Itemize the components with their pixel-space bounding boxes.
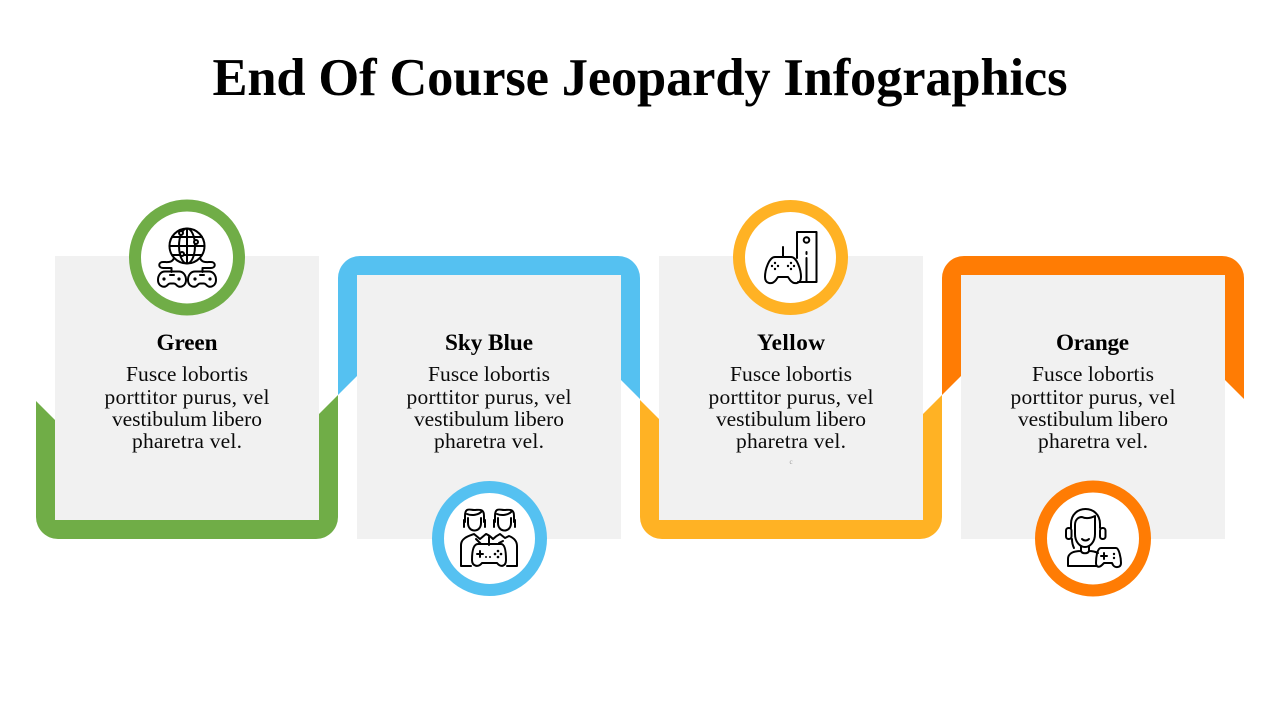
sky blue card background [357,275,621,539]
sky blue body text: pharetra vel. [434,429,544,453]
sky blue body text [406,362,572,453]
panel: yellow [640,206,942,539]
green body text [104,362,270,453]
green body text: vestibulum libero [112,407,262,431]
orange body text: Fusce lobortis [1032,362,1154,386]
icon: gamer with headset and controller [1066,509,1121,567]
icon: globe with two game controllers [158,228,216,287]
orange body text [1010,362,1176,453]
yellow body text [708,362,874,453]
panel: green [36,206,338,539]
panel: sky blue [338,256,640,590]
panel: orange [942,256,1244,590]
yellow body text: Fusce lobortis [730,362,852,386]
green body text: pharetra vel. [132,429,242,453]
yellow heading: Yellow [757,330,825,356]
yellow body text: vestibulum libero [716,407,866,431]
orange body text: vestibulum libero [1018,407,1168,431]
green bracket [36,395,338,539]
title: End Of Course Jeopardy Infographics [212,49,1068,107]
green body text: porttitor purus, vel [104,385,270,409]
sky blue bracket [338,256,640,399]
yellow icon ring [739,206,842,309]
sky blue body text: Fusce lobortis [428,362,550,386]
orange icon ring [1041,486,1145,590]
yellow body text: pharetra vel. [736,429,846,453]
tiny stray character: c [789,458,793,466]
yellow card background [659,256,923,520]
yellow bracket [640,395,942,539]
yellow body text: porttitor purus, vel [708,385,874,409]
sky blue body text: porttitor purus, vel [406,385,572,409]
green heading: Green [156,330,218,356]
orange body text: porttitor purus, vel [1010,385,1176,409]
icon: game console and controller [765,232,816,283]
orange bracket [942,256,1244,399]
green icon ring [135,206,239,310]
orange heading: Orange [1056,330,1129,356]
orange card background [961,275,1225,539]
sky blue body text: vestibulum libero [414,407,564,431]
sky blue heading: Sky Blue [445,330,533,356]
orange body text: pharetra vel. [1038,429,1148,453]
green card background [55,256,319,520]
green body text: Fusce lobortis [126,362,248,386]
sky blue icon ring [438,487,541,590]
icon: two players with controller [461,510,517,566]
